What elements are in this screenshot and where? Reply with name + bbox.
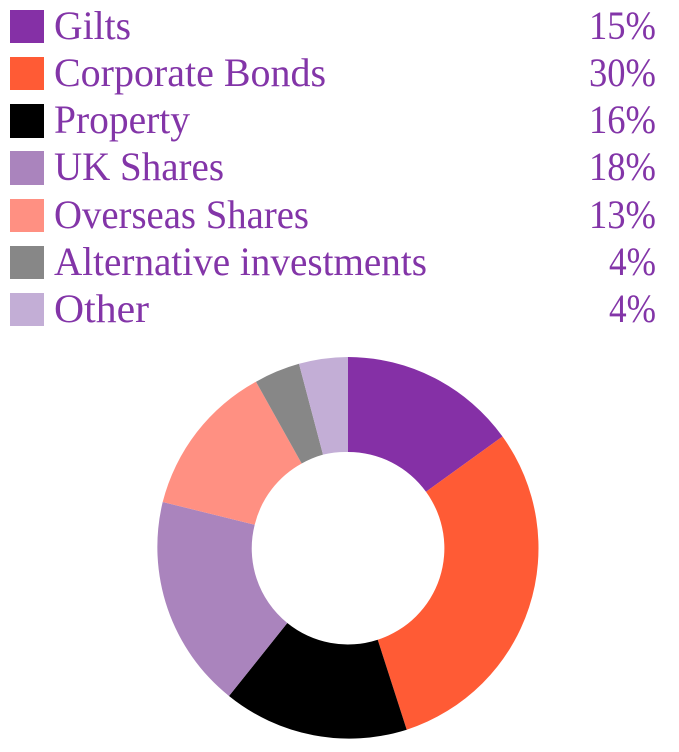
segment: UK Shares 18% [157,502,287,696]
legend row: Gilts [10,3,656,48]
legend row: Corporate Bonds: Corporate Bonds [54,50,326,95]
legend row: UK Shares [10,144,656,189]
legend row: Corporate Bonds: 30% [589,50,656,95]
legend row: Gilts: 15% [589,3,656,48]
legend row: Gilts: Gilts [54,3,131,48]
segment: Overseas Shares 13% [163,382,302,525]
legend row: Alternative investments: 4% [609,239,656,284]
legend row: Property [10,97,656,142]
legend row: UK Shares: 18% [589,144,656,189]
legend row: Alternative investments: Alternative investments [54,239,427,284]
segment: Corporate Bonds 30% [378,436,538,730]
legend row: Other: 4% [609,286,656,331]
legend row: Property: 16% [589,97,656,142]
segment: Property 16% [229,623,407,739]
legend row: Property: Property [54,97,190,142]
legend row: Corporate Bonds [10,50,656,95]
legend row: Alternative investments [10,239,656,284]
segment: Other 4% [299,357,348,455]
legend row: Other [10,286,656,331]
legend row: Other: Other [54,286,149,331]
segment: Alternative investments 4% [256,364,323,464]
legend row: Overseas Shares [10,192,656,237]
legend row: Overseas Shares: Overseas Shares [54,192,309,237]
legend row: UK Shares: UK Shares [54,144,224,189]
segment: Gilts 15% [348,357,502,492]
legend [10,3,656,331]
legend row: Overseas Shares: 13% [589,192,656,237]
donut chart [157,357,538,739]
